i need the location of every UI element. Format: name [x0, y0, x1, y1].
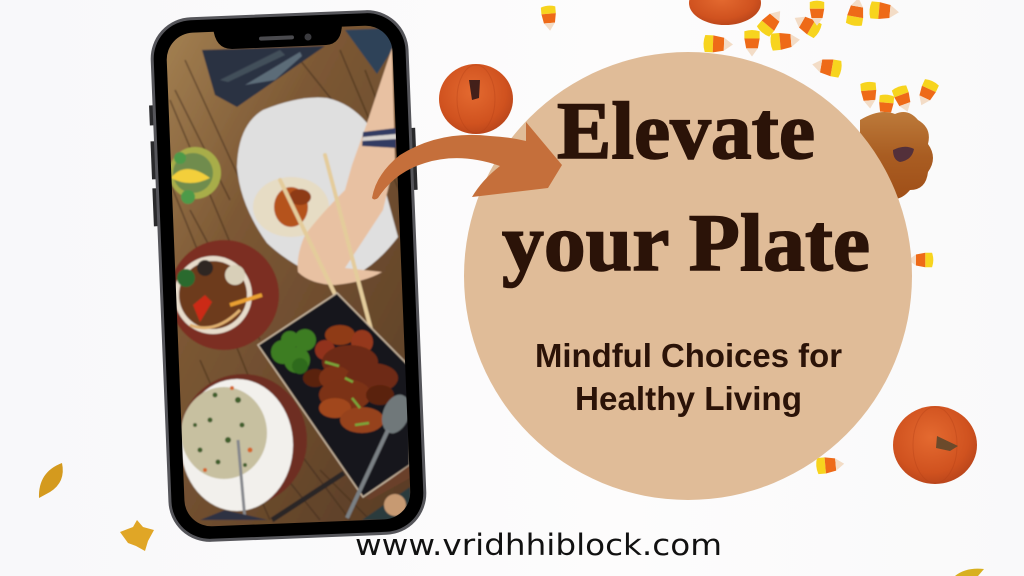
subtitle	[535, 337, 842, 417]
title: Elevate	[557, 85, 815, 176]
phone side buttons	[149, 95, 419, 226]
website url: www.vridhhiblock.com	[355, 528, 722, 562]
bottom corner dishes	[200, 473, 412, 520]
pumpkin: top	[689, 0, 761, 25]
leaf: bottom	[120, 520, 154, 551]
title circle	[464, 52, 912, 500]
denim corner	[345, 28, 395, 74]
chopsticks	[280, 155, 372, 342]
phone camera	[304, 34, 312, 40]
rice bowl	[179, 374, 307, 520]
arm and hand	[298, 48, 395, 285]
leaf: bottom right	[955, 569, 984, 576]
rice and chicken on plate	[253, 177, 329, 237]
subtitle: Mindful Choices for	[535, 337, 842, 374]
title	[502, 85, 870, 288]
wood table	[166, 26, 410, 526]
phone	[149, 10, 430, 542]
leaf: left	[39, 463, 63, 498]
lemon water glass	[169, 147, 221, 204]
phone notch	[213, 23, 342, 49]
phone body	[151, 10, 426, 542]
spoon	[347, 391, 415, 518]
title: your Plate	[502, 197, 870, 288]
pumpkin: bottom right	[893, 406, 977, 484]
glazed chicken	[303, 325, 398, 433]
wristband	[362, 128, 396, 148]
parsley	[271, 329, 316, 374]
subtitle: Healthy Living	[575, 380, 802, 417]
phone speaker	[259, 35, 294, 41]
soup bowl	[169, 240, 279, 350]
candy corn scatter	[541, 0, 939, 474]
dark tray	[258, 293, 410, 500]
arrow	[372, 122, 562, 200]
napkin and cutlery	[202, 46, 325, 107]
food photo on screen	[166, 26, 410, 526]
pumpkin: right of circle	[860, 112, 933, 199]
pumpkin: left of circle	[439, 64, 513, 134]
white plate	[237, 98, 398, 282]
